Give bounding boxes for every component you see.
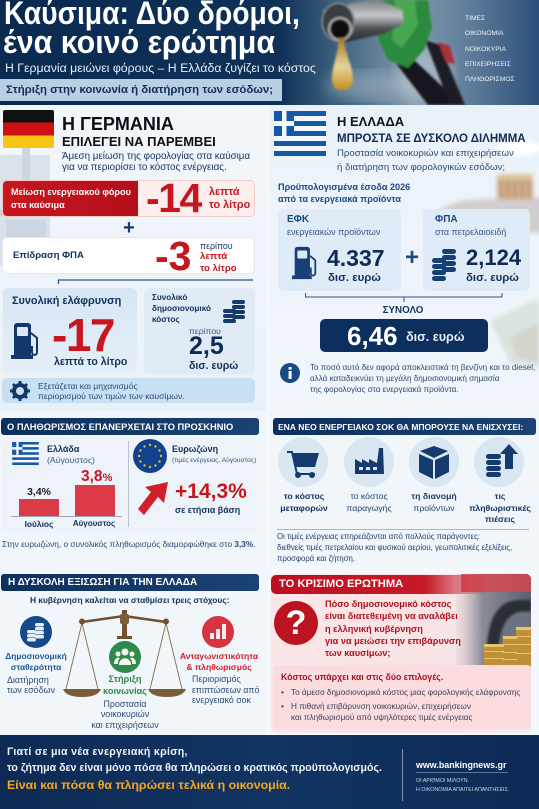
Greece label: Ελλάδα	[47, 444, 79, 454]
excise label: ΕΦΚ	[287, 214, 309, 225]
inflation heading: Ο ΠΛΗΘΩΡΙΣΜΟΣ ΕΠΑΝΕΡΧΕΤΑΙ ΣΤΟ ΠΡΟΣΚΗΝΙΟ	[7, 422, 233, 432]
cost bullets	[281, 687, 521, 725]
plus sign: +	[123, 217, 135, 239]
info text: της φορολογίας στα ενεργειακά προϊόντα.	[310, 385, 459, 394]
cost bullets: και πληθωρισμού από υψηλότερες τιμές ενέργειας	[291, 713, 472, 722]
goal: fiscal stability: Διατήρηση	[7, 675, 49, 685]
total value box: 6,46	[347, 321, 398, 351]
item: transport costs: μεταφορών	[280, 503, 328, 513]
item: inflationary pressures: πληθωριστικές	[469, 503, 531, 513]
arrow	[138, 482, 168, 515]
value -14: -14	[146, 175, 201, 221]
goal: social support: Προστασία	[104, 699, 146, 709]
value 2,5: περίπου	[189, 326, 221, 336]
value 2,5: 2,5	[189, 332, 224, 360]
Germany heading: ΕΠΙΛΕΓΕΙ ΝΑ ΠΑΡΕΜΒΕΙ	[62, 134, 216, 149]
note text: Εξετάζεται και μηχανισμός	[38, 381, 138, 391]
inflation card	[2, 437, 256, 532]
topic list: ΟΙΚΟΝΟΜΙΑ	[465, 30, 503, 37]
energy tax cut row	[2, 180, 255, 217]
icon: cart	[278, 437, 328, 487]
inflation heading	[1, 418, 259, 435]
icon: coins in blue circle	[20, 616, 52, 648]
Germany heading: Η ΓΕΡΜΑΝΙΑ	[62, 114, 174, 134]
value 2,124: 2,124	[466, 245, 521, 270]
panel: Germany	[0, 105, 266, 411]
value 4.337: 4.337	[327, 245, 385, 271]
bar chart: 3,8%	[81, 468, 113, 485]
Germany description: Άμεση μείωση της φορολογίας στα καύσιμα	[62, 151, 250, 162]
Greece label	[47, 444, 95, 465]
fiscal cost label: Συνολικό	[152, 293, 187, 302]
icon: coins	[223, 300, 245, 323]
Germany description	[62, 151, 250, 173]
fuel nozzle photo with drop	[280, 0, 539, 105]
shock heading	[273, 418, 536, 435]
fiscal cost card	[144, 288, 255, 374]
fiscal cost label	[152, 293, 211, 324]
bar chart: 3,4%	[27, 487, 51, 498]
item: inflationary pressures	[470, 437, 530, 527]
value +14,3%: +14,3%	[175, 480, 247, 503]
fiscal cost label: δημοσιονομικό	[152, 304, 211, 313]
item: production costs	[344, 437, 394, 513]
site credit: ΟΙ ΑΡΙΘΜΟΙ ΜΙΛΟΥΝ.	[416, 778, 469, 784]
value +14,3%: σε ετήσια βάση	[175, 505, 240, 515]
item: inflationary pressures: πιέσεις	[485, 514, 515, 524]
question strip: Στήριξη στην κοινωνία ή διατήρηση των εσόδων;	[6, 84, 273, 96]
cost bullets: Η πιθανή επιβάρυνση νοικοκυριών, επιχειρήσεων	[291, 702, 471, 711]
goal: fiscal stability: των εσόδων	[7, 685, 55, 695]
value 2,124	[466, 245, 521, 284]
icon: coins	[432, 249, 456, 281]
excise label	[287, 214, 380, 237]
tax cut label: στα καύσιμα	[11, 200, 65, 210]
site credit: Η ΟΙΚΟΝΟΜΙΑ ΑΠΑΙΤΕΙ ΑΠΑΝΤΗΣΕΙΣ.	[416, 787, 509, 793]
equation subtitle: Η κυβέρνηση καλείται να σταθμίσει τρεις στόχους:	[30, 595, 229, 605]
Eurozone label: (τιμές ενέργειας, Αύγουστος)	[172, 457, 256, 464]
value 4.337: δισ. ευρώ	[328, 272, 381, 284]
unit: το λίτρο	[209, 199, 250, 211]
goal: fiscal stability: Δημοσιονομική	[5, 651, 67, 661]
budget revenue heading	[278, 182, 410, 204]
icon: factory	[344, 437, 394, 487]
icon: EU flag	[133, 439, 167, 473]
item: product distribution: τη διανομή	[411, 491, 457, 501]
VAT label	[435, 214, 506, 237]
card: excise duty	[278, 209, 401, 291]
topic list: ΤΙΜΕΣ	[465, 15, 485, 22]
Germany description: για να περιορίσει το κόστος ενέργειας.	[62, 162, 227, 173]
excise label: ενεργειακών προϊόντων	[287, 227, 380, 237]
icon: info	[280, 363, 300, 383]
icon: Greek flag	[274, 111, 326, 156]
icon: fuel pump	[11, 323, 38, 359]
closing statement	[7, 745, 397, 793]
unit	[200, 241, 237, 274]
item: production costs: το κόστος	[350, 491, 388, 501]
energy factors note: προσφορά και ζήτηση.	[277, 554, 355, 563]
panel: inflation	[0, 412, 266, 566]
goal: competitiveness and inflation	[178, 616, 260, 708]
question strip	[0, 79, 282, 101]
tax cut label	[3, 181, 138, 216]
goal: competitiveness and inflation: & πληθωρισμός	[186, 662, 252, 672]
unit: περίπου	[200, 241, 233, 251]
question text	[325, 598, 465, 660]
equation heading: Η ΔΥΣΚΟΛΗ ΕΞΙΣΩΣΗ ΓΙΑ ΤΗΝ ΕΛΛΑΔΑ	[8, 577, 197, 588]
panel: energy shock	[270, 412, 539, 566]
question text: είναι διατεθειμένη να αναλάβει	[325, 611, 458, 621]
total value box	[320, 319, 488, 352]
cost bullets: •	[281, 688, 284, 697]
goal: social support: νοικοκυριών	[101, 709, 149, 719]
goal: social support	[90, 641, 162, 731]
item: production costs: παραγωγής	[346, 503, 392, 513]
bar chart	[11, 468, 122, 517]
eurozone footnote: Στην ευρωζώνη, ο συνολικός πληθωρισμός διαμορφώθηκε στο 3,3%.	[2, 539, 256, 549]
energy factors note	[277, 530, 517, 566]
cost note box	[273, 665, 531, 729]
goal: social support: κοινωνίας	[103, 686, 147, 696]
Greece heading	[337, 114, 526, 145]
bar labels: Ιούλιος	[25, 519, 53, 529]
icon: people in green circle	[109, 641, 141, 673]
value 2,5	[189, 326, 238, 372]
goal: fiscal stability	[4, 616, 70, 698]
topic list: ΠΛΗΘΩΡΙΣΜΟΣ	[465, 76, 515, 83]
item: transport costs: το κόστος	[284, 491, 324, 501]
info text	[310, 363, 535, 394]
cost bullets: Το άμεσο δημοσιονομικό κόστος μιας φορολογικής ελάφρυνσης	[291, 688, 520, 697]
info text: αλλά καταδεικνύει τη μεγάλη δημοσιονομική σημασία	[310, 374, 499, 383]
fiscal cost label: κόστος	[152, 315, 180, 324]
panel: critical question	[271, 574, 531, 733]
VAT effect row	[2, 237, 255, 274]
Greece description	[337, 148, 514, 173]
note text	[38, 381, 185, 401]
goal: fiscal stability: σταθερότητα	[11, 662, 61, 672]
goal: social support: Στήριξη	[108, 674, 142, 684]
goal: competitiveness and inflation: Περιορισμός	[192, 674, 241, 684]
tax cut label: Μείωση ενεργειακού φόρου	[11, 187, 131, 197]
total label: ΣΥΝΟΛΟ	[383, 305, 423, 316]
topic list: ΕΠΙΧΕΙΡΗΣΕΙΣ	[465, 61, 511, 68]
Eurozone label: Ευρωζώνη	[172, 444, 218, 454]
icon: box	[409, 437, 459, 487]
topic list	[465, 15, 515, 83]
icon: question mark	[274, 601, 318, 645]
unit	[209, 186, 250, 211]
cost note title: Κόστος υπάρχει και στις δύο επιλογές.	[281, 672, 443, 682]
closing statement: Γιατί σε μια νέα ενεργειακή κρίση,	[7, 746, 188, 758]
card: VAT	[423, 209, 530, 291]
question text: Πόσο δημοσιονομικό κόστος	[325, 599, 451, 609]
icon: gear	[10, 381, 30, 401]
title	[3, 0, 300, 60]
critical question heading: ΤΟ ΚΡΙΣΙΜΟ ΕΡΩΤΗΜΑ	[279, 578, 403, 590]
unit: το λίτρο	[200, 263, 237, 274]
mechanism note	[2, 378, 255, 403]
question text: για να μειώσει την επιβάρυνση	[325, 636, 461, 646]
icon: bars in red circle	[202, 616, 234, 648]
VAT label: Επίδραση ΦΠΑ	[13, 250, 84, 261]
panel: Greece	[270, 105, 539, 411]
goal: competitiveness and inflation: Ανταγωνιστικότητα	[180, 651, 258, 661]
value +14,3%	[175, 480, 247, 515]
icon: coins with arrow	[474, 437, 524, 487]
critical question heading	[271, 575, 491, 594]
Greece heading: Η ΕΛΛΑΔΑ	[337, 114, 404, 129]
budget revenue heading: Προϋπολογισμένα έσοδα 2026	[278, 182, 410, 192]
panel: difficult equation	[0, 567, 266, 735]
icon: question mark: ?	[286, 604, 306, 642]
note text: περιορισμού των τιμών των καυσίμων.	[38, 391, 185, 401]
shock heading: ΕΝΑ ΝΕΟ ΕΝΕΡΓΕΙΑΚΟ ΣΟΚ ΘΑ ΜΠΟΡΟΥΣΕ ΝΑ ΕΝΙΣΧΥΣΕΙ:	[278, 422, 523, 432]
energy factors note: Οι τιμές ενέργειας επηρεάζονται από πολλούς παράγοντες:	[277, 532, 480, 541]
bar labels	[25, 519, 115, 529]
closing statement: το ζήτημα δεν είναι μόνο πόσα θα πληρώσει ο κρατικός προϋπολογισμός.	[7, 762, 382, 774]
scale illustration	[60, 607, 190, 699]
site credit: www.bankingnews.gr	[416, 760, 506, 770]
icon: German flag	[3, 110, 54, 148]
value -3: -3	[155, 233, 191, 279]
unit: λεπτά	[200, 251, 227, 262]
item: transport costs	[278, 437, 328, 513]
Germany heading	[62, 114, 216, 149]
info text: Το ποσό αυτό δεν αφορά αποκλειστικά τη βενζίνη και το diesel,	[310, 363, 535, 372]
value 2,124: δισ. ευρώ	[466, 272, 519, 284]
energy factors note: διεθνείς τιμές πετρελαίου και φυσικού αερίου, γεωπολιτικές εξελίξεις,	[277, 543, 512, 552]
unit: λεπτά	[209, 186, 240, 198]
budget revenue heading: από τα ενεργειακά προϊόντα	[278, 194, 401, 204]
Greece heading: ΜΠΡΟΣΤΑ ΣΕ ΔΥΣΚΟΛΟ ΔΙΛΗΜΜΑ	[337, 133, 526, 145]
topic list: ΝΟΙΚΟΚΥΡΙΑ	[465, 46, 506, 53]
VAT label: ΦΠΑ	[435, 214, 458, 225]
goal: competitiveness and inflation: ενεργειακό σοκ	[192, 695, 251, 705]
Greece label: (Αύγουστος)	[47, 455, 95, 465]
goal: competitiveness and inflation: επιπτώσεων από	[192, 685, 259, 695]
Eurozone label	[172, 444, 256, 464]
plus sign: +	[405, 244, 419, 271]
site credit	[416, 759, 511, 795]
header banner	[0, 0, 539, 105]
VAT label: στα πετρελαιοειδή	[435, 227, 506, 237]
value 4.337	[327, 245, 385, 284]
total value box: δισ. ευρώ	[406, 330, 464, 344]
subtitle: Η Γερμανία μειώνει φόρους – Η Ελλάδα ζυγίζει το κόστος	[5, 61, 316, 75]
Greece description: Προστασία νοικοκυριών και επιχειρήσεων	[337, 148, 514, 159]
bar labels: Αύγουστος	[73, 519, 115, 528]
photo: pump and coins	[456, 574, 531, 666]
item: inflationary pressures: τις	[495, 491, 505, 501]
footer band	[0, 735, 539, 809]
icon: fuel pump	[292, 246, 316, 280]
goal: social support: και επιχειρήσεων	[91, 720, 159, 730]
item: product distribution	[409, 437, 459, 513]
closing statement: Είναι και πόσα θα πληρώσει τελικά η οικονομία.	[7, 778, 290, 792]
item: product distribution: προϊόντων	[413, 503, 455, 513]
total relief card	[3, 288, 137, 374]
value 2,5: δισ. ευρώ	[189, 360, 238, 372]
Greece description: ή διατήρηση των φορολογικών εσόδων;	[337, 162, 505, 173]
unit: λεπτά το λίτρο	[54, 356, 127, 368]
value -17: -17	[52, 309, 114, 361]
title: ένα κοινό ερώτημα	[3, 24, 275, 60]
icon: Greek flag	[12, 442, 39, 465]
equation heading	[1, 574, 259, 591]
total relief heading: Συνολική ελάφρυνση	[12, 295, 121, 307]
question text: των καυσίμων;	[325, 648, 390, 658]
cost bullets: •	[281, 702, 284, 711]
question text: η ελληνική κυβέρνηση	[325, 624, 423, 634]
